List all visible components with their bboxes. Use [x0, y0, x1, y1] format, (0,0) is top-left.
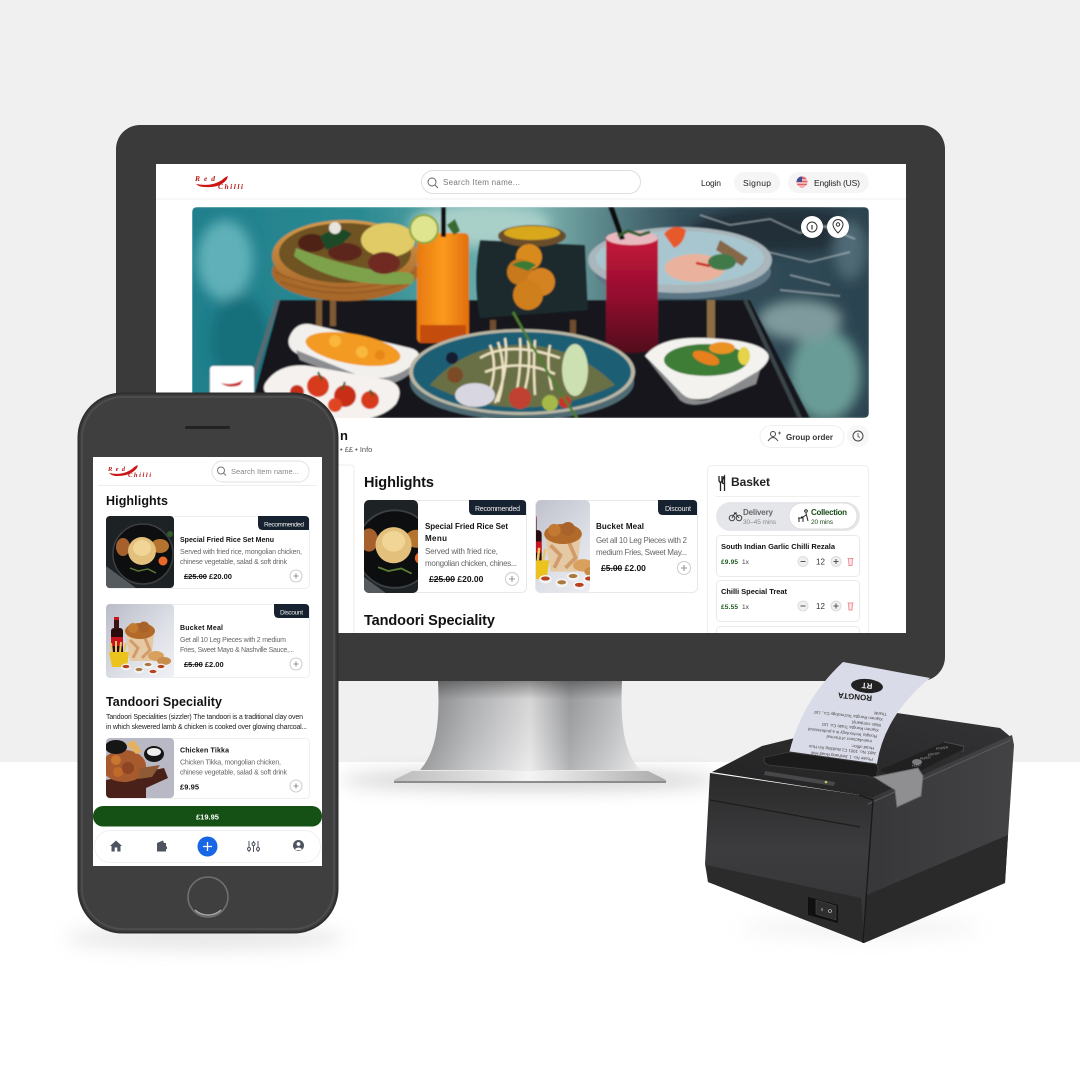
basket item 2: £5.55: [721, 604, 738, 611]
phone screen: [93, 457, 322, 866]
location button: [827, 216, 849, 238]
monitor stand: [340, 680, 720, 789]
badge: discount: [658, 500, 697, 515]
search box: Search Item name...: [443, 178, 520, 187]
control panel: ERROR: [928, 751, 941, 757]
icon: cutlery: [719, 476, 724, 491]
orange drink: [410, 207, 469, 343]
receipt text: Xiamen Rongta Technology Co., Ltd: [814, 710, 883, 722]
basket item 2: 1x: [742, 604, 750, 611]
control panel: [880, 742, 966, 781]
receipt text: Thank!: [874, 711, 887, 717]
phone card: special fried rice: [106, 516, 310, 588]
icon: person collecting: [798, 510, 808, 522]
slate with fritters and yellow dip: [476, 225, 588, 318]
card price: £5.00 £2.00: [184, 660, 224, 669]
delivery and collection toggle: 30–45 mins: [743, 519, 777, 526]
desktop monitor: [116, 125, 945, 789]
phone card: bucket meal: [106, 604, 310, 678]
blue salad bowl: [409, 312, 635, 420]
monitor frame: [116, 125, 945, 681]
badge: discount: [274, 604, 309, 618]
icon: filters: [248, 841, 260, 852]
basket item 2: [716, 580, 860, 622]
delivery and collection toggle: Delivery: [743, 508, 774, 517]
card description: mongolian chicken, chines...: [425, 559, 517, 568]
printer front face: [705, 773, 873, 943]
add button: [290, 570, 302, 582]
login link: Login: [701, 178, 721, 188]
highlights heading: Highlights: [364, 475, 434, 491]
tandoori speciality heading: Tandoori Speciality: [364, 613, 495, 629]
basket item 3 partially visible: [716, 626, 860, 656]
signup pill: [734, 172, 780, 193]
group order pill: [760, 426, 844, 448]
info button: [801, 216, 823, 238]
language pill: [788, 172, 869, 193]
card image: fried rice: [364, 500, 418, 593]
receipt paper: [788, 662, 930, 764]
card title: Chicken Tikka: [180, 748, 229, 754]
icon: bicycle: [729, 513, 742, 521]
phone card: chicken tikka: [102, 738, 310, 798]
card description: Get all 10 Leg Pieces with 2 medium: [180, 637, 286, 644]
restaurant meta fragment: • ££ • Info: [340, 445, 372, 454]
card image: tikka: [102, 738, 174, 798]
receipt text: [808, 710, 887, 762]
basket item 1: 12: [816, 558, 825, 566]
card description: chinese vegetable, salad & soft drink: [180, 770, 288, 776]
badge: discount: Discount: [280, 610, 303, 616]
delivery and collection toggle: [716, 502, 860, 531]
badge: recommended: [469, 500, 526, 515]
receipt text: Head office:: [851, 744, 874, 751]
receipt text: Xiamen Rongta Trade Co. Ltd: [821, 722, 879, 733]
green basket total bar: £19.95: [196, 812, 219, 822]
add button: [290, 658, 302, 670]
icon: wallet: [157, 840, 167, 852]
badge: recommended: [258, 516, 309, 530]
wood plate with steak: [272, 220, 418, 301]
hero food photograph: [192, 203, 870, 421]
tandoori description: in which skewered lamb & chicken is cooked over glowing charcoal...: [106, 724, 307, 731]
search box: [422, 170, 640, 194]
card price: £25.00 £20.00: [184, 572, 232, 581]
badge: discount: Discount: [665, 506, 691, 513]
logo: Red Chilli: Red: [194, 174, 215, 183]
printer rear top shell: [712, 713, 1012, 800]
desktop card: special fried rice: [347, 500, 526, 593]
home button: [188, 877, 228, 917]
printer top window: [766, 748, 876, 776]
printer right side: [864, 735, 1014, 943]
silver cover latch: [874, 768, 923, 807]
restaurant logo tile: [208, 364, 256, 392]
logo: Red Chilli: Chilli: [128, 472, 151, 479]
earpiece: [185, 426, 230, 429]
card image: bucket: [536, 500, 590, 593]
receipt text: Add: No. 1901 C1 Building Xin Hua: [808, 744, 876, 756]
control panel: POWER: [936, 745, 949, 751]
icon: user: [293, 840, 304, 851]
card description: medium Fries, Sweet May...: [596, 548, 687, 557]
control panel: PAPER: [920, 755, 932, 761]
receipt logo: RT: [861, 681, 873, 690]
delivery and collection toggle: Collection: [811, 508, 847, 517]
search box: Search Item name...: [231, 467, 299, 476]
badge: recommended: Recommended: [264, 522, 304, 528]
badge: recommended: Recommended: [475, 506, 520, 513]
phone body: [78, 394, 338, 932]
card title: Menu: [425, 534, 447, 543]
red drink: [606, 207, 658, 353]
card title: Bucket Meal: [180, 625, 223, 632]
card description: chinese vegetable, salad & soft drink: [180, 559, 288, 566]
monitor screen: [156, 164, 906, 656]
restaurant name fragment: n: [340, 428, 348, 443]
power switch: [808, 897, 838, 923]
card description: Served with fried rice,: [425, 547, 498, 556]
logo: Red Chilli: Chilli: [218, 182, 244, 191]
card description: Fries, Sweet Mayo & Nashville Sauce,...: [180, 647, 294, 654]
card description: Get all 10 Leg Pieces with 2: [596, 536, 688, 545]
receipt brand name: RONGTA: [837, 691, 872, 702]
white bowl: orange food: [289, 324, 419, 385]
category side panel edge: [338, 465, 354, 633]
receipt text: Phase No. 1 Jinshang Road Huli: [811, 751, 873, 762]
add button: [678, 562, 690, 574]
group order pill: Group order: [786, 433, 833, 442]
logo: Red Chilli: [107, 465, 151, 479]
logo: Red Chilli: [195, 176, 243, 189]
highlights heading: Highlights: [106, 494, 168, 508]
card title: Special Fried Rice Set: [425, 522, 508, 531]
basket item 1: 1x: [742, 559, 750, 566]
dark table: [248, 300, 810, 418]
teal wall patches: [197, 203, 870, 421]
add button: [506, 572, 518, 586]
card title: Special Fried Rice Set Menu: [180, 537, 274, 544]
card price: £25.00 £20.00: [429, 574, 484, 584]
phone drop shadow: [65, 927, 345, 949]
tandoori description: Tandoori Specialities (sizzler) The tandoori is a traditional clay oven: [106, 714, 303, 721]
basket item 1: South Indian Garlic Chilli Rezala: [721, 542, 836, 551]
printer floor shadow: [740, 918, 980, 938]
card price: £9.95: [180, 782, 199, 792]
add button: [290, 780, 302, 792]
card price: £5.00 £2.00: [601, 563, 646, 573]
icon: home: [110, 840, 122, 852]
desktop card: bucket meal: [520, 500, 698, 593]
bottom navigation: [94, 830, 320, 862]
white bowl: greens: [645, 338, 769, 405]
logo: Red Chilli: Red: [107, 466, 126, 473]
basket item 1: [716, 536, 860, 576]
control panel: FEED: [912, 763, 921, 768]
icon: add button: [198, 836, 218, 856]
card description: Served with fried rice, mongolian chicken,: [180, 549, 302, 556]
phone top bar: [98, 461, 317, 486]
card image: bucket: [106, 604, 174, 678]
basket title: Basket: [731, 475, 770, 489]
card image: fried rice: [106, 516, 174, 588]
printer front lower band: [706, 865, 864, 943]
white bowl: tomatoes: [264, 365, 400, 420]
signup pill: Signup: [743, 178, 771, 188]
basket item 2: 12: [816, 602, 825, 611]
card title: Bucket Meal: [596, 522, 644, 531]
printer indicator strip: [764, 771, 835, 786]
receipt text: manufacturer of thermal: [826, 734, 872, 744]
basket item 1: £9.95: [721, 559, 738, 566]
schedule clock button: [852, 430, 864, 442]
receipt printer: [705, 662, 1014, 943]
receipt text: Rongta Technology is a professional: [808, 727, 877, 739]
delivery and collection toggle: 20 mins: [811, 519, 834, 526]
receipt text: Main company): [851, 720, 881, 728]
basket item 2: Chilli Special Treat: [721, 587, 788, 596]
basket panel: [708, 466, 868, 656]
green basket total bar: [93, 806, 322, 826]
printer right lower band: [862, 835, 1008, 943]
language pill: English (US): [814, 178, 860, 188]
desktop top navigation: [156, 170, 906, 199]
blue plate with prawns: [588, 227, 772, 299]
printer paper lid lip: [764, 752, 878, 777]
smartphone: [78, 394, 338, 932]
tandoori speciality heading: Tandoori Speciality: [106, 695, 222, 709]
receipt logo: [850, 678, 884, 694]
search box: [212, 461, 309, 482]
card description: Chicken Tikka, mongolian chicken,: [180, 760, 281, 766]
